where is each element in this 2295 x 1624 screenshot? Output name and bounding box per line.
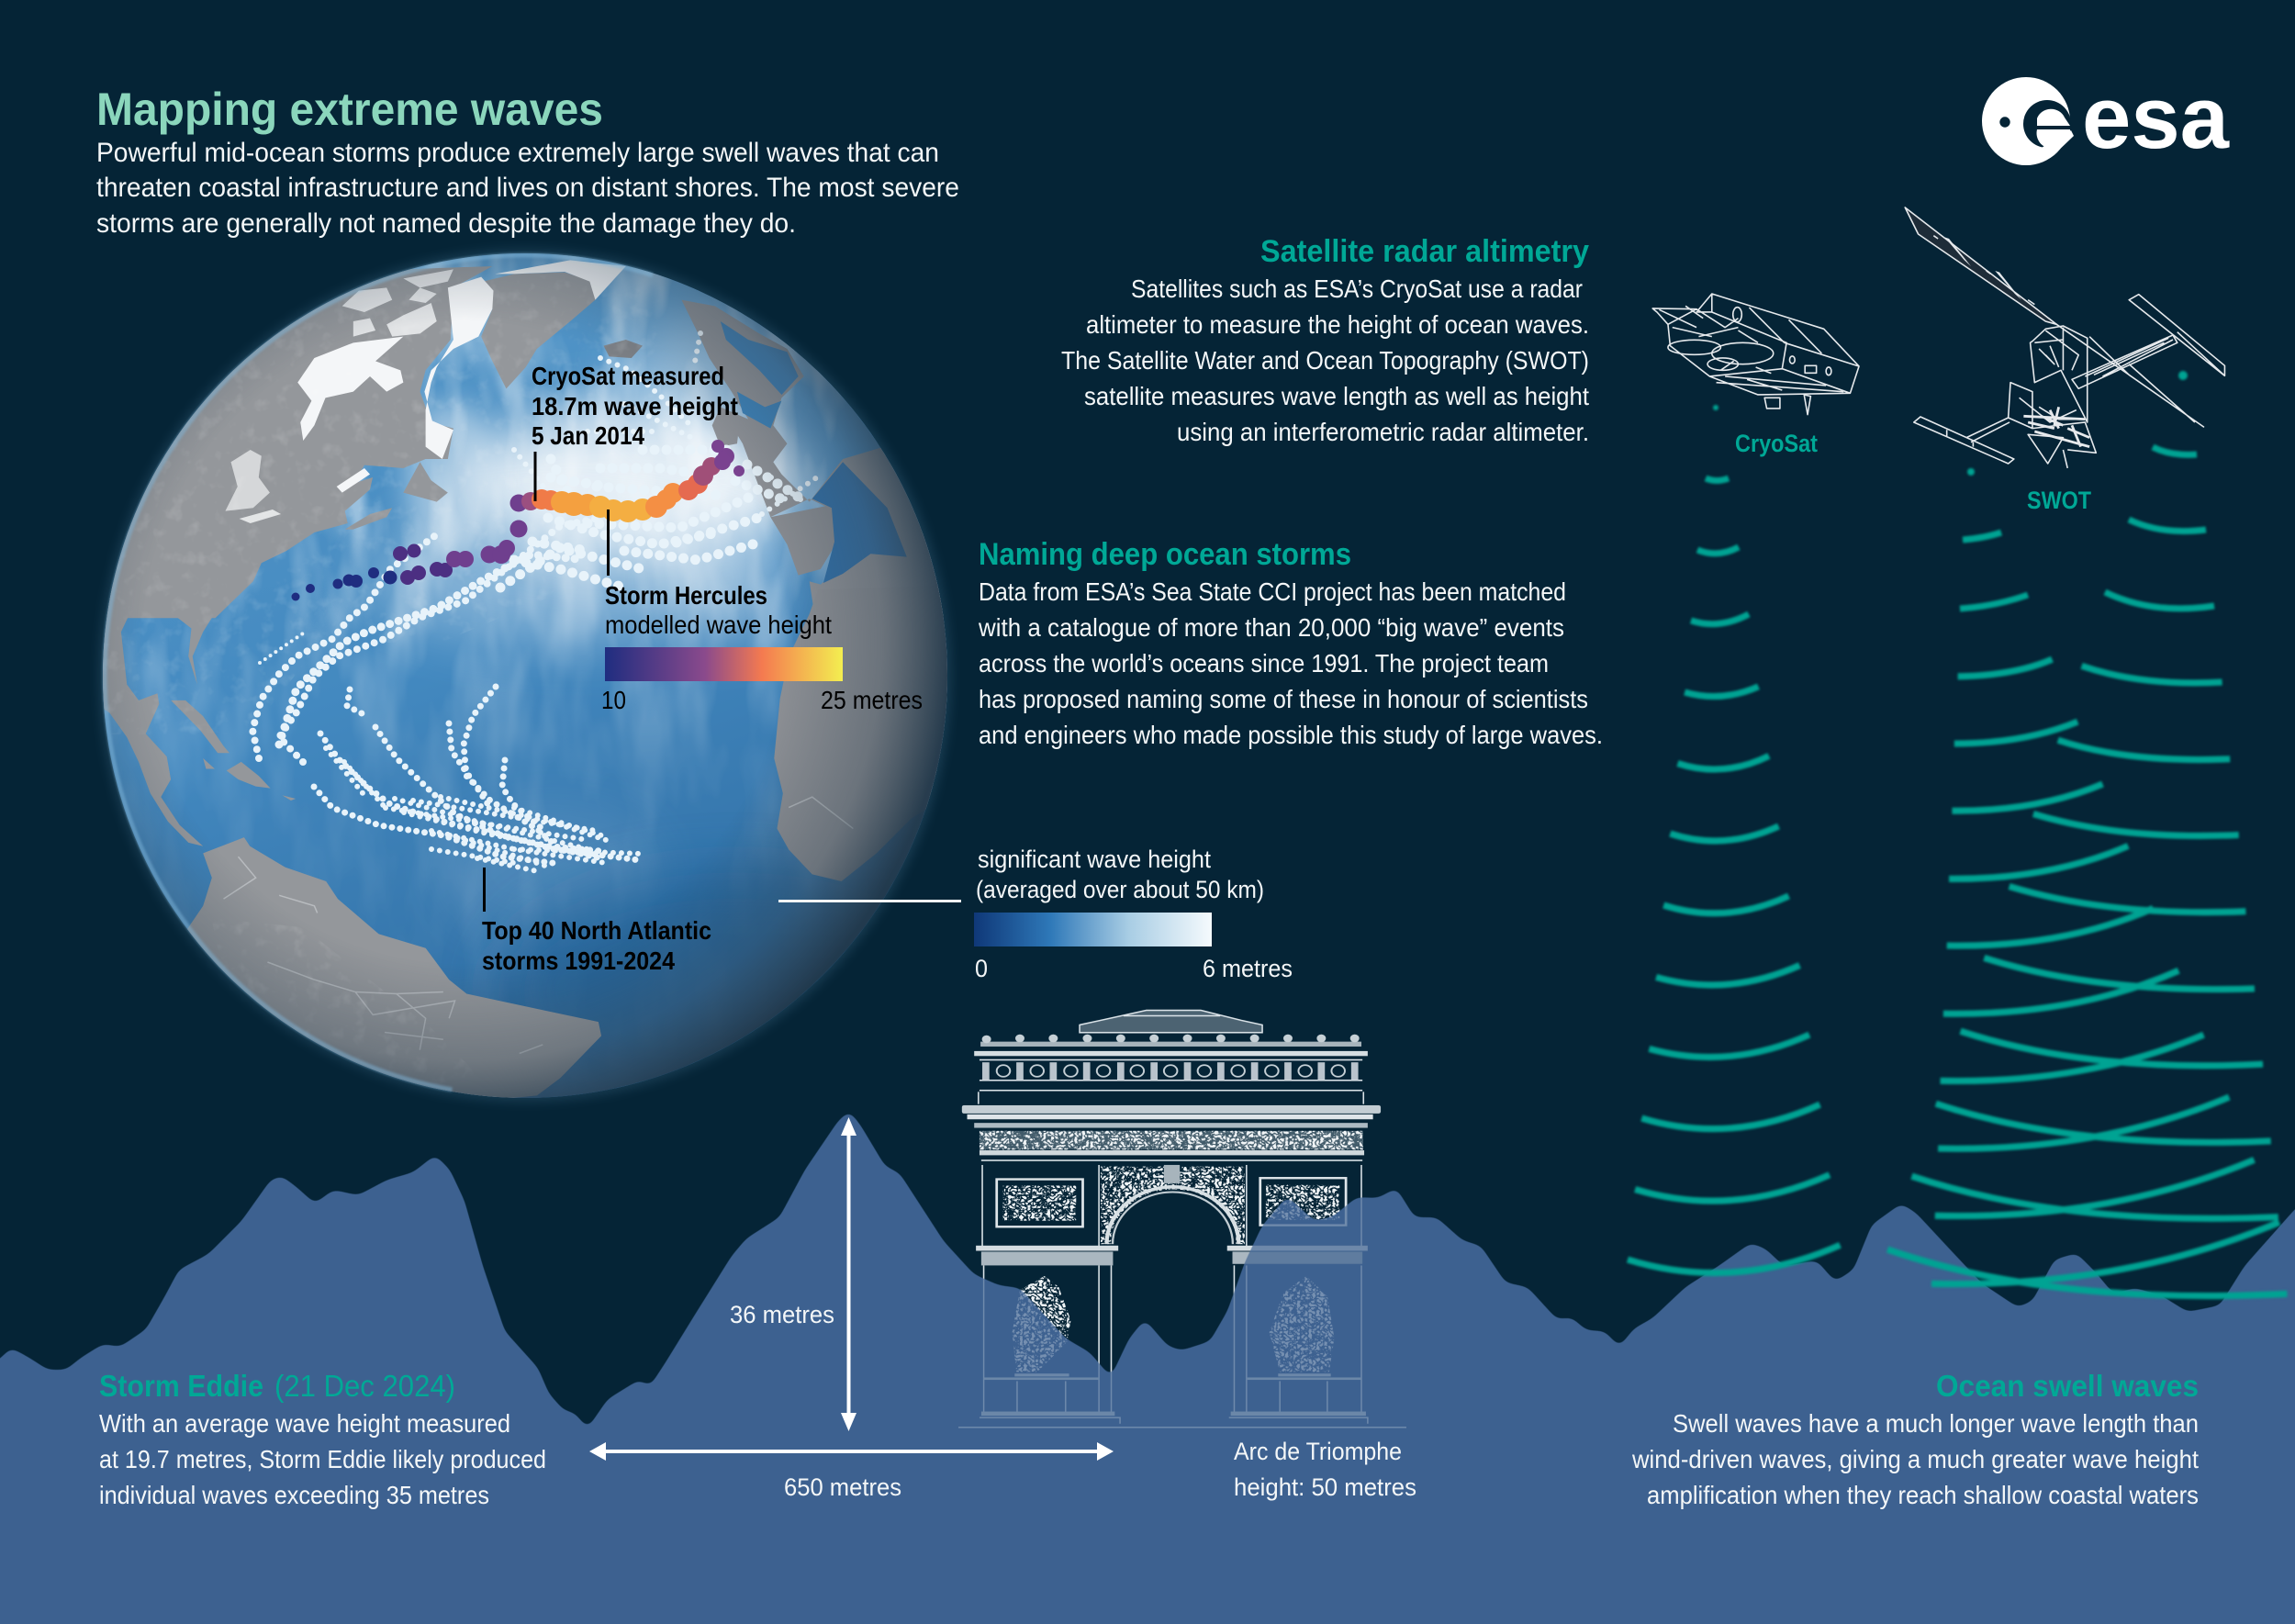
storm Hercules track — [292, 440, 744, 600]
heading and text: satellite radar altimetry: using an interferometric radar altimeter. — [1177, 418, 1589, 446]
top 40 storm tracks — [252, 333, 817, 872]
label: Arc de Triomphe: height: 50 metres — [1234, 1473, 1416, 1501]
text: Storm Eddie — [99, 1369, 546, 1509]
label: CryoSat: CryoSat — [1735, 430, 1818, 457]
legend: significant wave height: 6 metres — [1203, 955, 1293, 982]
legend: significant wave height: significant wave height — [978, 846, 1211, 873]
label: Top 40 North Atlantic storms — [482, 868, 711, 975]
land: ice and lakes — [225, 260, 626, 523]
arrow: wave height — [841, 1117, 856, 1431]
label: Arc de Triomphe — [1234, 1438, 1416, 1501]
label: Storm Hercules: Storm Hercules — [605, 581, 767, 610]
intro text: storms are generally not named despite the damage they do. — [96, 208, 796, 239]
land relief texture — [108, 285, 661, 1019]
label: 650 metres: 650 metres — [784, 1473, 901, 1501]
heading and text: satellite radar altimetry: altimeter to measure the height of ocean waves. — [1086, 310, 1589, 339]
globe edge shading — [103, 253, 947, 1098]
text: Ocean swell waves: Swell waves have a much longer wave length than — [1673, 1409, 2199, 1438]
label: SWOT: SWOT — [2027, 487, 2091, 514]
land: americas and africa — [103, 583, 947, 1098]
label: CryoSat measured — [532, 362, 738, 501]
heading and text: naming deep ocean storms: has proposed naming some of these in honour of scientists — [979, 685, 1588, 713]
label: Top 40 North Atlantic storms: Top 40 North Atlantic — [482, 916, 711, 945]
label: Storm Hercules — [605, 510, 832, 639]
text: Ocean swell waves — [1631, 1369, 2199, 1509]
heading and text: satellite radar altimetry — [1061, 234, 1589, 446]
radar pulses: SWOT — [1887, 371, 2287, 1296]
arrow: wave length — [589, 1442, 1114, 1461]
intro text: Powerful mid-ocean storms produce extremely large swell waves that can — [96, 138, 939, 168]
land: north — [106, 266, 944, 619]
globe — [33, 188, 1037, 1163]
intro text — [96, 138, 959, 239]
title: Mapping extreme waves — [96, 84, 603, 135]
text: Ocean swell waves: Ocean swell waves — [1936, 1369, 2199, 1403]
wave height patches — [367, 312, 808, 936]
logo: esa — [1982, 69, 2230, 167]
legend: modelled wave height colour bar — [601, 647, 923, 714]
text: Storm Eddie: With an average wave height measured — [99, 1409, 510, 1438]
lower right deep ocean — [494, 867, 814, 1036]
label: 36 metres: 36 metres — [730, 1301, 834, 1328]
legend: significant wave height: (averaged over about 50 km) — [976, 876, 1264, 903]
text: Storm Eddie: (21 Dec 2024) — [274, 1369, 455, 1403]
text: Storm Eddie: Storm Eddie — [99, 1369, 263, 1403]
heading and text: satellite radar altimetry: Satellites such as ESA’s CryoSat use a radar — [1131, 274, 1583, 303]
intro text: threaten coastal infrastructure and lives on distant shores. The most severe — [96, 173, 959, 203]
heading and text: naming deep ocean storms: and engineers who made possible this study of large waves. — [979, 721, 1603, 749]
radar pulses: CryoSat — [1628, 405, 1840, 1272]
heading and text: satellite radar altimetry: Satellite radar altimetry — [1260, 234, 1589, 269]
heading and text: satellite radar altimetry: The Satellite Water and Ocean Topography (SWOT) — [1061, 346, 1589, 375]
label: CryoSat measured: 18.7m wave height — [532, 392, 738, 420]
icon: SWOT satellite — [1905, 207, 2224, 468]
text: Storm Eddie: individual waves exceeding 35 metres — [99, 1481, 489, 1509]
wave height texture — [105, 254, 938, 987]
label: Arc de Triomphe: Arc de Triomphe — [1234, 1438, 1402, 1465]
heading and text: naming deep ocean storms — [978, 537, 1603, 749]
Arc de Triomphe — [958, 1011, 1406, 1428]
heading and text: naming deep ocean storms: Naming deep ocean storms — [979, 537, 1351, 572]
heading and text: naming deep ocean storms: with a catalogue of more than 20,000 “big wave” events — [978, 613, 1564, 642]
text: Ocean swell waves: wind-driven waves, giving a much greater wave height — [1631, 1445, 2199, 1473]
Arc de Triomphe seen through wave — [958, 1011, 1406, 1428]
legend: modelled wave height colour bar: 25 metres — [821, 686, 923, 714]
label: Storm Hercules: modelled wave height — [605, 610, 832, 639]
swell wave silhouette — [0, 1111, 2295, 1624]
text: Storm Eddie: at 19.7 metres, Storm Eddie likely produced — [99, 1445, 546, 1473]
logo: esa: esa — [2082, 69, 2230, 167]
ocean base — [92, 248, 964, 1111]
icon: CryoSat satellite — [1652, 294, 1859, 415]
label: CryoSat measured: CryoSat measured — [532, 362, 724, 390]
label: Top 40 North Atlantic storms: storms 1991-2024 — [482, 946, 675, 975]
heading and text: satellite radar altimetry: satellite measures wave length as well as height — [1084, 382, 1589, 410]
text: Ocean swell waves: amplification when they reach shallow coastal waters — [1647, 1481, 2199, 1509]
heading and text: naming deep ocean storms: Data from ESA’s Sea State CCI project has been matched — [979, 577, 1566, 606]
legend: modelled wave height colour bar: 10 — [601, 686, 626, 714]
legend: significant wave height: 0 — [975, 955, 988, 982]
legend: significant wave height — [974, 846, 1293, 982]
heading and text: naming deep ocean storms: across the world’s oceans since 1991. The project team — [979, 649, 1549, 678]
legend pointer line — [778, 900, 961, 902]
label: CryoSat measured: 5 Jan 2014 — [532, 421, 644, 450]
